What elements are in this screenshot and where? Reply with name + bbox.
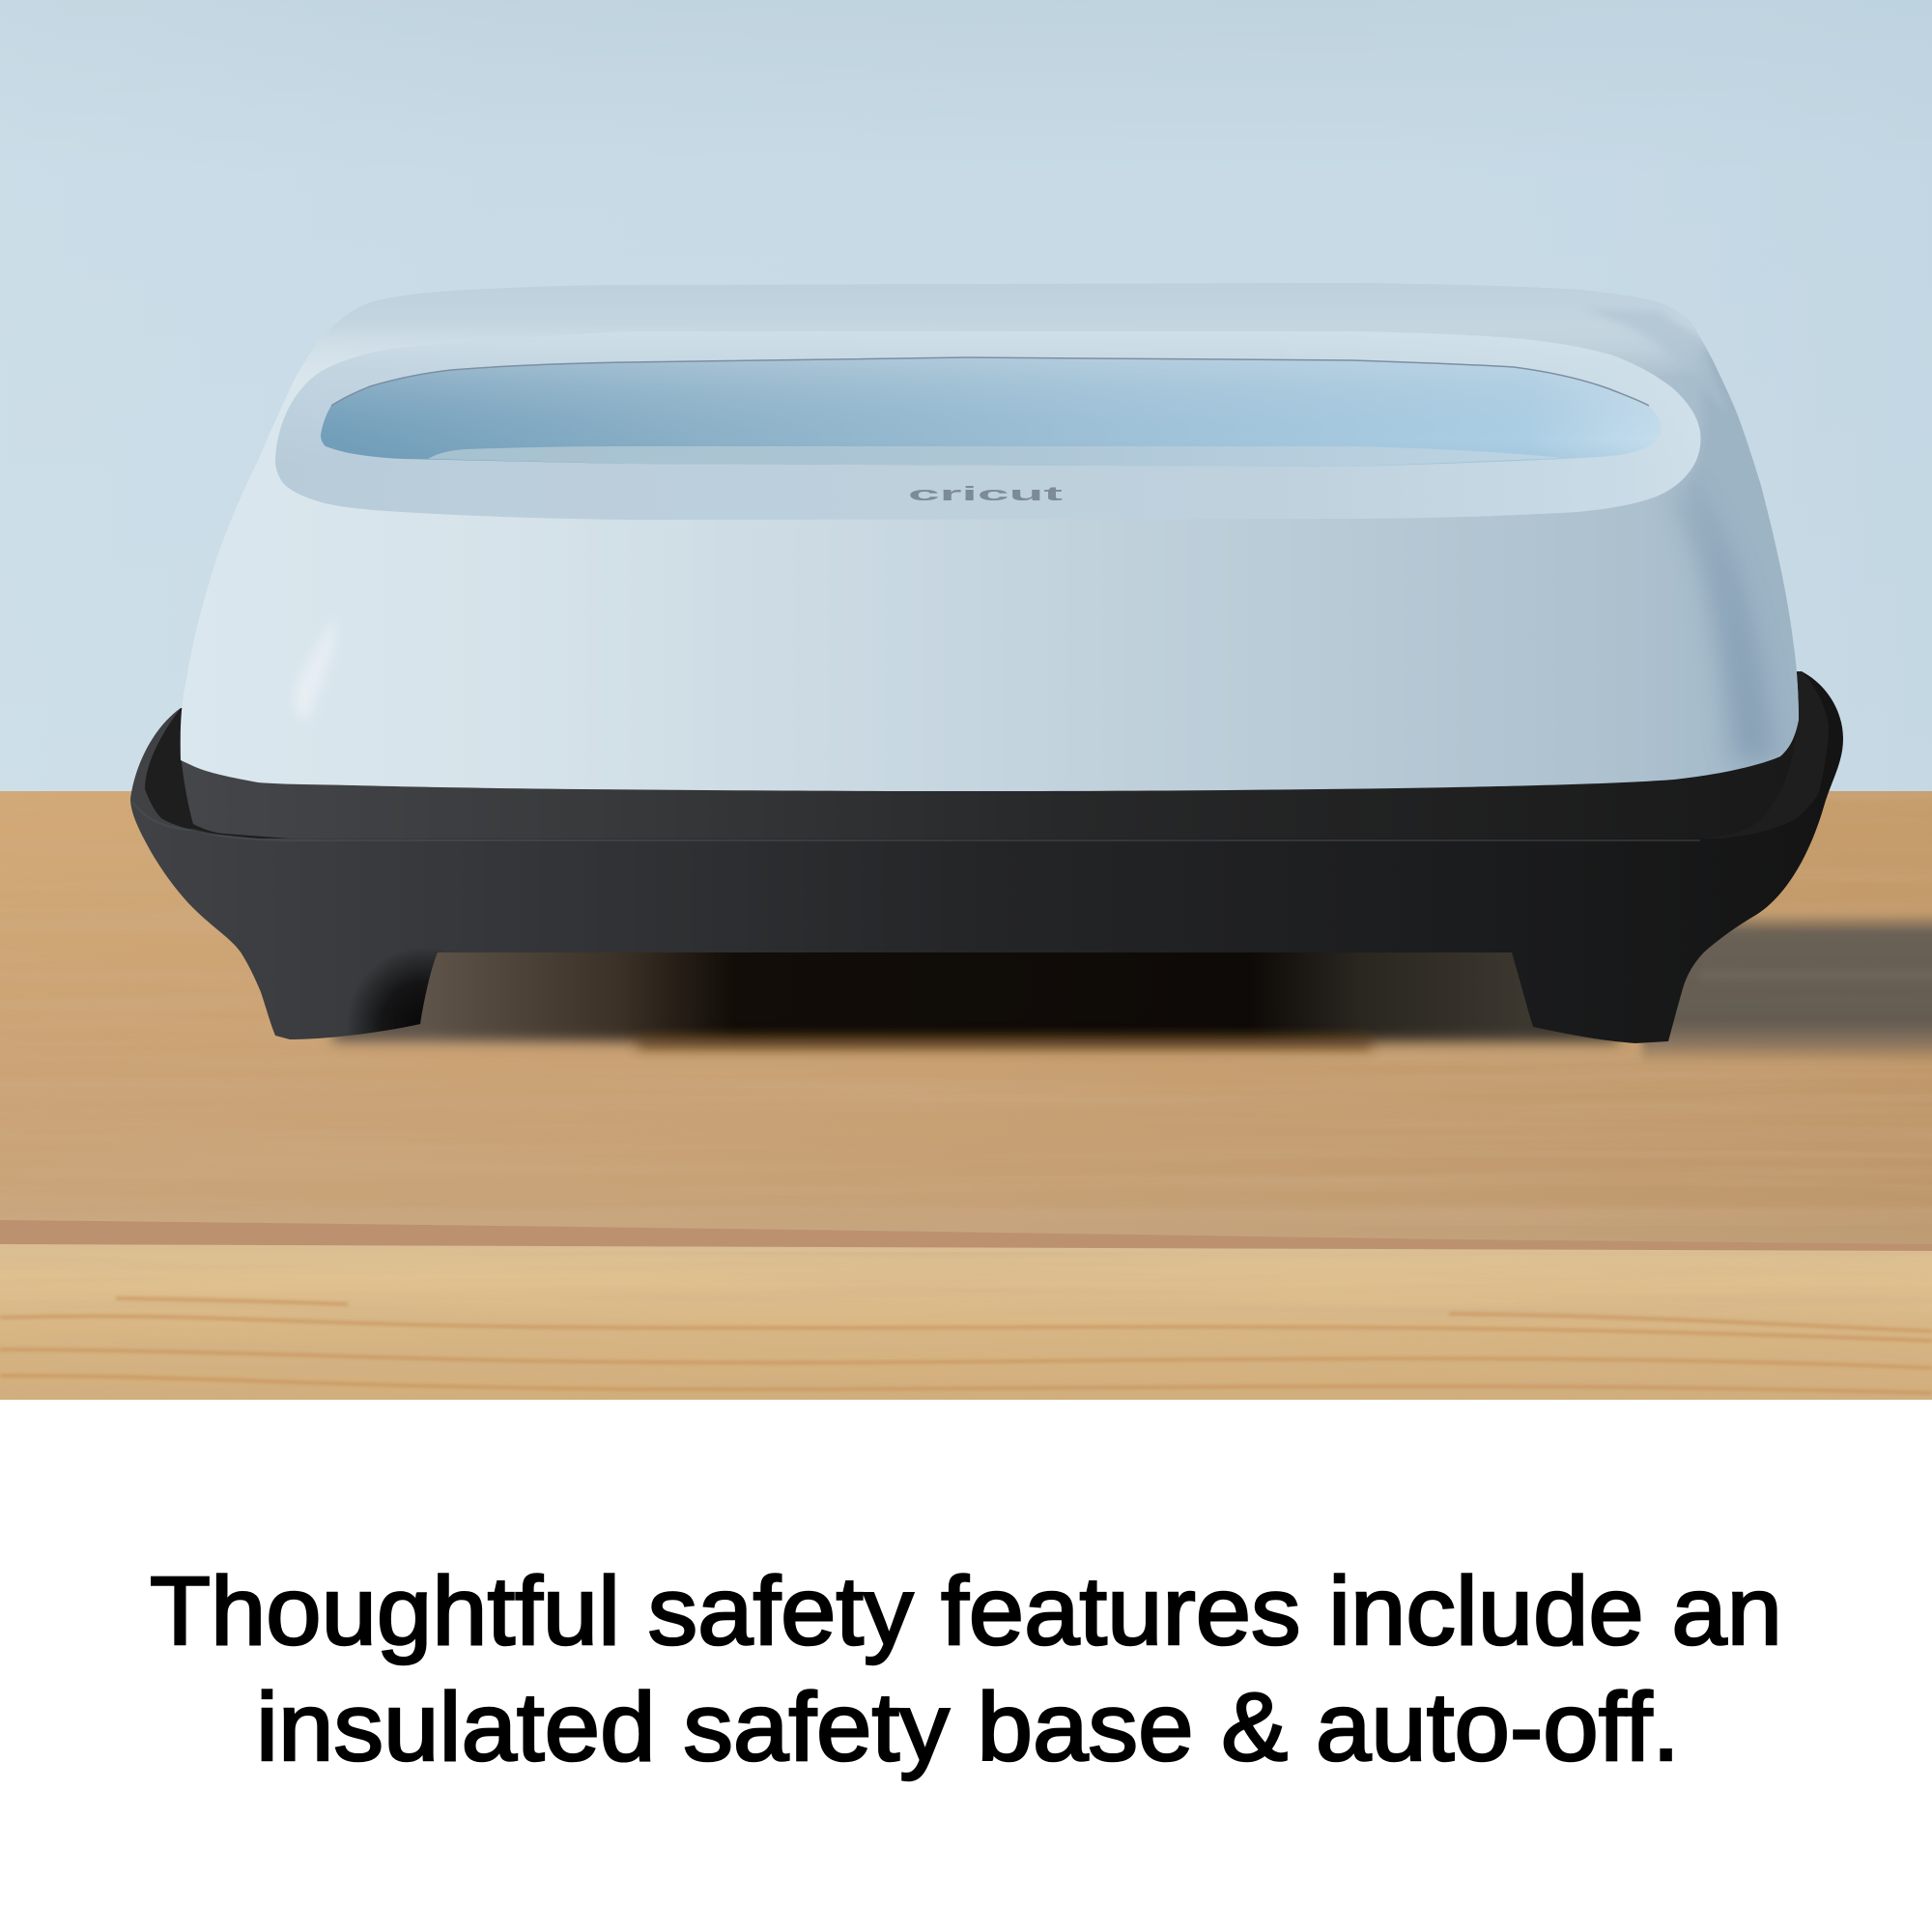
lid front ring [275,331,1701,520]
caption line 1: Thoughtful safety features include an [150,1557,1782,1665]
glossy highlight [296,634,332,715]
cricut logo: cricut [908,484,1064,505]
opening floor [428,446,1562,467]
dark shadow between the feet [325,952,1625,1052]
tray interior [145,671,1829,838]
lid upper surface [314,284,1706,365]
wall background [0,0,1932,794]
right side crease [1676,488,1773,763]
wooden table [0,791,1932,1400]
heat press body [174,280,1811,791]
inner black band [181,724,1797,838]
safety base tray [130,671,1843,1048]
tray outer shell with feet [130,671,1843,1043]
upper right wrap shading [1604,311,1697,355]
handle opening [321,357,1662,467]
product photo [0,0,1932,1400]
shadow beneath the press [325,914,1932,1062]
lighter streak in reflection [1700,970,1932,981]
tray rim highlight [132,802,1700,840]
body shell [181,283,1799,791]
caption line 2: insulated safety base & auto-off. [256,1673,1680,1781]
left foot inner shading [354,954,437,1035]
warm shadow fade on wood [638,1037,1372,1048]
clipped body shading [174,280,1811,763]
caption [150,1557,1782,1781]
grey reflection right of foot [1642,913,1932,1065]
right side strip [1692,344,1799,763]
opening top seam [331,357,1649,406]
